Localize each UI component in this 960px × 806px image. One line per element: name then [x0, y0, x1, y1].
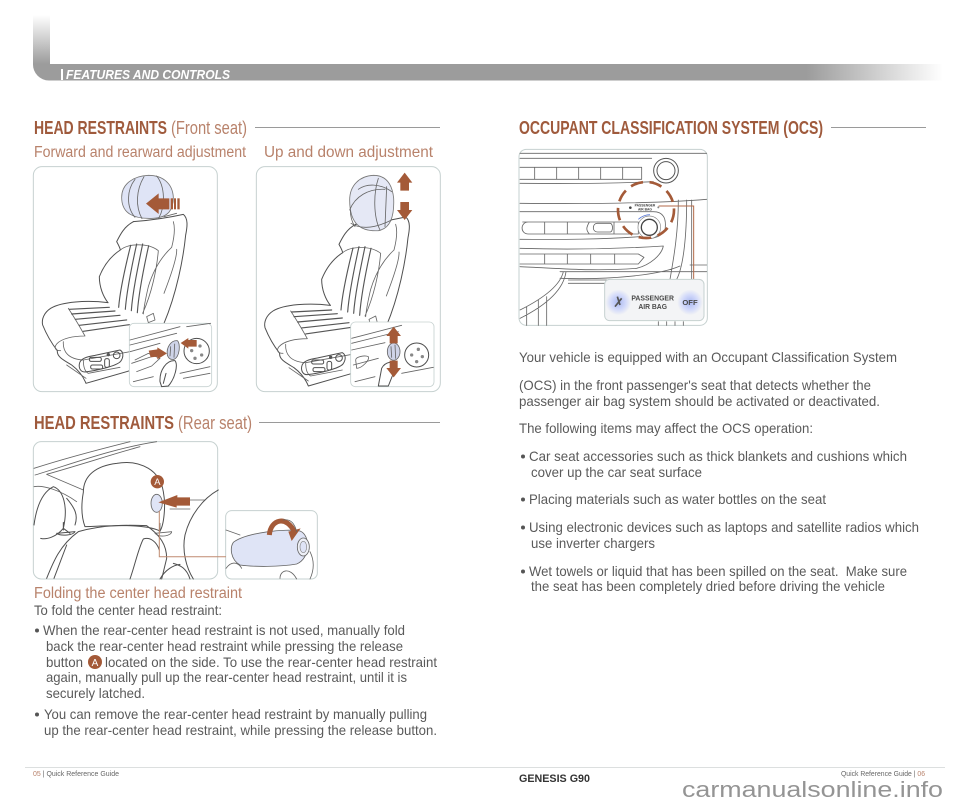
- headrest with forward arrow: [122, 175, 180, 219]
- heading: head restraints front seat: [34, 118, 440, 138]
- rear head restraint: [82, 462, 165, 531]
- panel: rear seat head restraint illustration: [33, 442, 218, 579]
- leader line to folded restraint: [159, 511, 226, 557]
- text block: folding instructions: To fold the center head restraint:: [34, 603, 222, 618]
- callout A: [151, 475, 164, 488]
- text block: OCS description: The following items may affect the OCS operation:: [519, 421, 813, 436]
- panel: up and down seat illustration: [256, 167, 440, 392]
- text block: folding instructions: You can remove the rear-center head restraint by manually pulling: [44, 707, 427, 722]
- list: items affecting OCS: the seat has been completely dried before driving the vehicle: [531, 579, 885, 594]
- heading: head restraints rear seat: [34, 413, 440, 433]
- indicator label: PASSENGER: [635, 204, 656, 208]
- heading: occupant classification system: OCCUPANT CLASSIFICATION SYSTEM (OCS): [519, 118, 823, 138]
- dashed highlight circle: [618, 182, 674, 238]
- inset: seat switch with arrows: [129, 323, 212, 387]
- heading: head restraints front seat: HEAD RESTRAINTS: [34, 118, 167, 138]
- release button: [151, 494, 162, 512]
- page header band: [33, 15, 943, 82]
- panel: dashboard air bag indicator illustration: [519, 149, 707, 325]
- dashboard lines: [520, 153, 707, 325]
- footer left page label: 05 | Quick Reference Guide: [33, 769, 119, 778]
- footer model name: GENESIS G90: [519, 773, 590, 785]
- air bag off display: AIR BAG: [638, 302, 667, 311]
- list: items affecting OCS: Using electronic devices such as laptops and satellite radios which: [529, 520, 919, 535]
- subheading: forward and rearward adjustment: Forward and rearward adjustment: [34, 144, 247, 161]
- watermark: carmanualsonline.info: [682, 777, 943, 802]
- footer: [25, 768, 945, 802]
- panel: forward and rearward seat illustration: [33, 167, 217, 392]
- inline callout A: A: [92, 658, 99, 669]
- text block: folding instructions: up the rear-center head restraint, while pressing the release button.: [44, 723, 437, 738]
- text block: folding instructions: When the rear-center head restraint is not used, manually fold: [43, 623, 405, 638]
- section label: features and controls: FEATURES AND CONTROLS: [66, 67, 230, 82]
- release arrow: [158, 495, 190, 508]
- heading: head restraints rear seat: (Rear seat): [178, 413, 252, 433]
- indicator label: AIR BAG: [638, 207, 652, 211]
- heading: head restraints front seat: (Front seat): [171, 118, 247, 138]
- list: items affecting OCS: Car seat accessories such as thick blankets and cushions which: [529, 449, 907, 464]
- footer right page label: Quick Reference Guide | 06: [841, 769, 925, 778]
- air bag off display: PASSENGER: [631, 293, 674, 302]
- inline callout A: [88, 655, 102, 669]
- text block: folding instructions: again, manually pull up the rear-center head restraint, until it is: [46, 670, 407, 685]
- list: items affecting OCS: use inverter chargers: [531, 536, 655, 551]
- callout A: A: [154, 477, 161, 487]
- list: items affecting OCS: Wet towels or liquid that has been spilled on the seat. Make sure: [529, 564, 907, 579]
- text block: OCS description: Your vehicle is equipped with an Occupant Classification System: [519, 350, 897, 365]
- inset: seat switch with arrows: [351, 322, 434, 387]
- list: items affecting OCS: [521, 449, 919, 594]
- list: items affecting OCS: cover up the car seat surface: [531, 465, 702, 480]
- list: items affecting OCS: Placing materials such as water bottles on the seat: [529, 492, 826, 507]
- text block: folding instructions: back the rear-center head restraint while pressing the release: [46, 639, 403, 654]
- indicator label: [629, 204, 659, 211]
- text block: OCS description: [519, 350, 897, 436]
- rear cabin lines: [34, 442, 218, 579]
- subheading: up and down adjustment: Up and down adjustment: [264, 144, 434, 161]
- text block: OCS description: (OCS) in the front passenger's seat that detects whether the: [519, 378, 871, 393]
- text block: folding instructions: located on the side. To use the rear-center head restraint: [105, 655, 437, 670]
- text block: folding instructions: button: [46, 655, 83, 670]
- text block: OCS description: passenger air bag system should be activated or deactivated.: [519, 394, 880, 409]
- text block: folding instructions: [34, 603, 437, 738]
- upper knob: [654, 158, 678, 183]
- panel: folded head restraint inset: [226, 511, 317, 579]
- headrest with up and down arrows: [350, 173, 412, 231]
- air bag off display: OFF: [682, 298, 698, 307]
- subheading: folding the center head restraint: Folding the center head restraint: [34, 585, 243, 602]
- air bag off display: [605, 279, 704, 321]
- heading: head restraints rear seat: HEAD RESTRAINTS: [34, 413, 174, 433]
- lower knob: [638, 215, 661, 239]
- leader line: [659, 206, 694, 280]
- text block: folding instructions: securely latched.: [46, 686, 145, 701]
